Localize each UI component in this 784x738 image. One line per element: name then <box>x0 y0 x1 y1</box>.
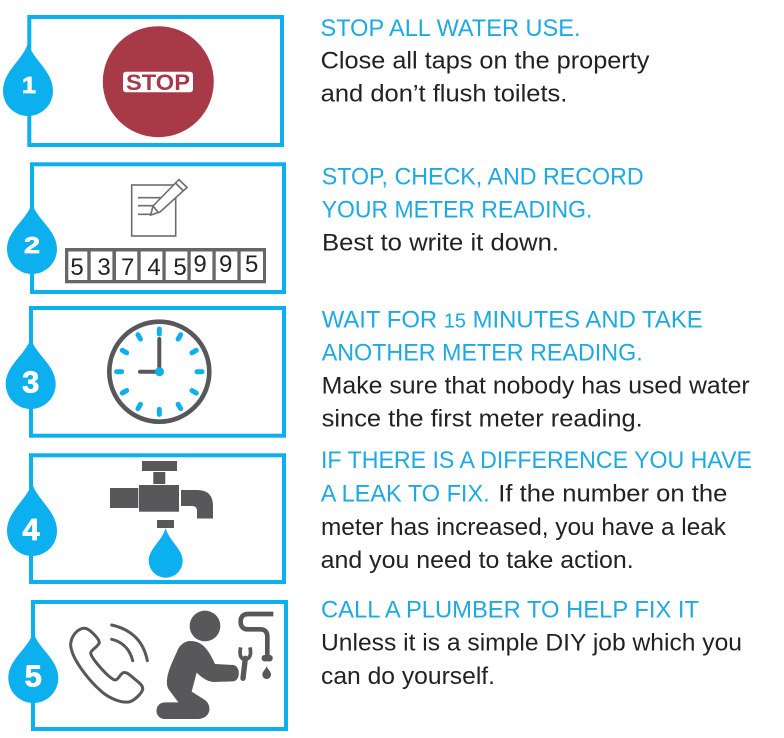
meter reading: 3 <box>97 254 111 281</box>
meter reading: 9 <box>219 251 232 278</box>
frame 3 <box>31 308 284 436</box>
drop badge 4 <box>7 483 57 556</box>
step 4 text: meter has increased, you have a leak <box>321 514 727 541</box>
step 3 text <box>322 307 750 433</box>
icon: dripping tap <box>110 461 213 578</box>
meter reading: 5 <box>70 254 84 281</box>
drop badge 3: 3 <box>22 365 39 400</box>
frame 1 <box>29 17 282 145</box>
step 3 text: Make sure that nobody has used water <box>322 373 750 400</box>
icon: clock <box>109 322 209 422</box>
step 5 text: Unless it is a simple DIY job which you <box>321 630 742 657</box>
step 4 text: If the number on the <box>498 480 727 508</box>
step 2 text: STOP, CHECK, AND RECORD <box>322 163 644 190</box>
step 2 panel <box>7 164 284 292</box>
icon: stop sign <box>103 26 214 137</box>
meter reading <box>65 248 266 283</box>
meter reading: 5 <box>173 254 187 281</box>
drop badge 3 <box>6 338 56 409</box>
step 1 text: and don’t flush toilets. <box>321 80 567 108</box>
meter reading: 7 <box>121 254 134 281</box>
step 1 panel <box>3 17 282 145</box>
icon: notepad and pencil <box>132 180 187 236</box>
step 2 text <box>322 163 644 256</box>
frame 4 <box>31 455 284 582</box>
step 4 text: and you need to take action. <box>321 547 634 574</box>
step 5 text <box>321 597 742 690</box>
meter reading: 4 <box>147 254 161 281</box>
icon: stop sign: STOP <box>126 70 190 95</box>
meter reading: 5 <box>245 251 258 278</box>
drop badge 5 <box>8 632 58 703</box>
step 4 text <box>321 447 752 574</box>
drop badge 2: 2 <box>24 232 40 258</box>
drop badge 4: 4 <box>22 512 40 547</box>
frame 2 <box>32 164 284 292</box>
icon: telephone handset <box>71 625 147 702</box>
drop badge 2 <box>7 203 57 274</box>
icon: plumber with wrench and leaking pipe <box>156 611 273 719</box>
step 1 text: Close all taps on the property <box>321 48 650 75</box>
step 5 text: CALL A PLUMBER TO HELP FIX IT <box>321 597 699 624</box>
step 3 text: ANOTHER METER READING. <box>322 340 643 367</box>
frame 5 <box>33 602 286 729</box>
step 4 text: A LEAK TO FIX. <box>321 480 490 508</box>
meter reading: 9 <box>193 251 207 278</box>
step 3 text: WAIT FOR 15 MINUTES AND TAKE <box>322 307 703 334</box>
step 1 text: STOP ALL WATER USE. <box>320 15 580 42</box>
step 2 text: Best to write it down. <box>322 230 559 256</box>
step 4 text: IF THERE IS A DIFFERENCE YOU HAVE <box>321 447 752 474</box>
step 3 text: since the first meter reading. <box>322 406 643 433</box>
drop badge 1: 1 <box>22 72 36 98</box>
step 2 text: YOUR METER READING. <box>322 196 592 223</box>
step 5 panel <box>8 602 286 729</box>
step 1 text <box>320 15 650 108</box>
step 5 text: can do yourself. <box>321 663 495 690</box>
step 4 panel <box>7 455 284 582</box>
drop badge 1 <box>3 43 53 116</box>
step 3 panel <box>6 308 284 436</box>
drop badge 5: 5 <box>25 659 42 694</box>
